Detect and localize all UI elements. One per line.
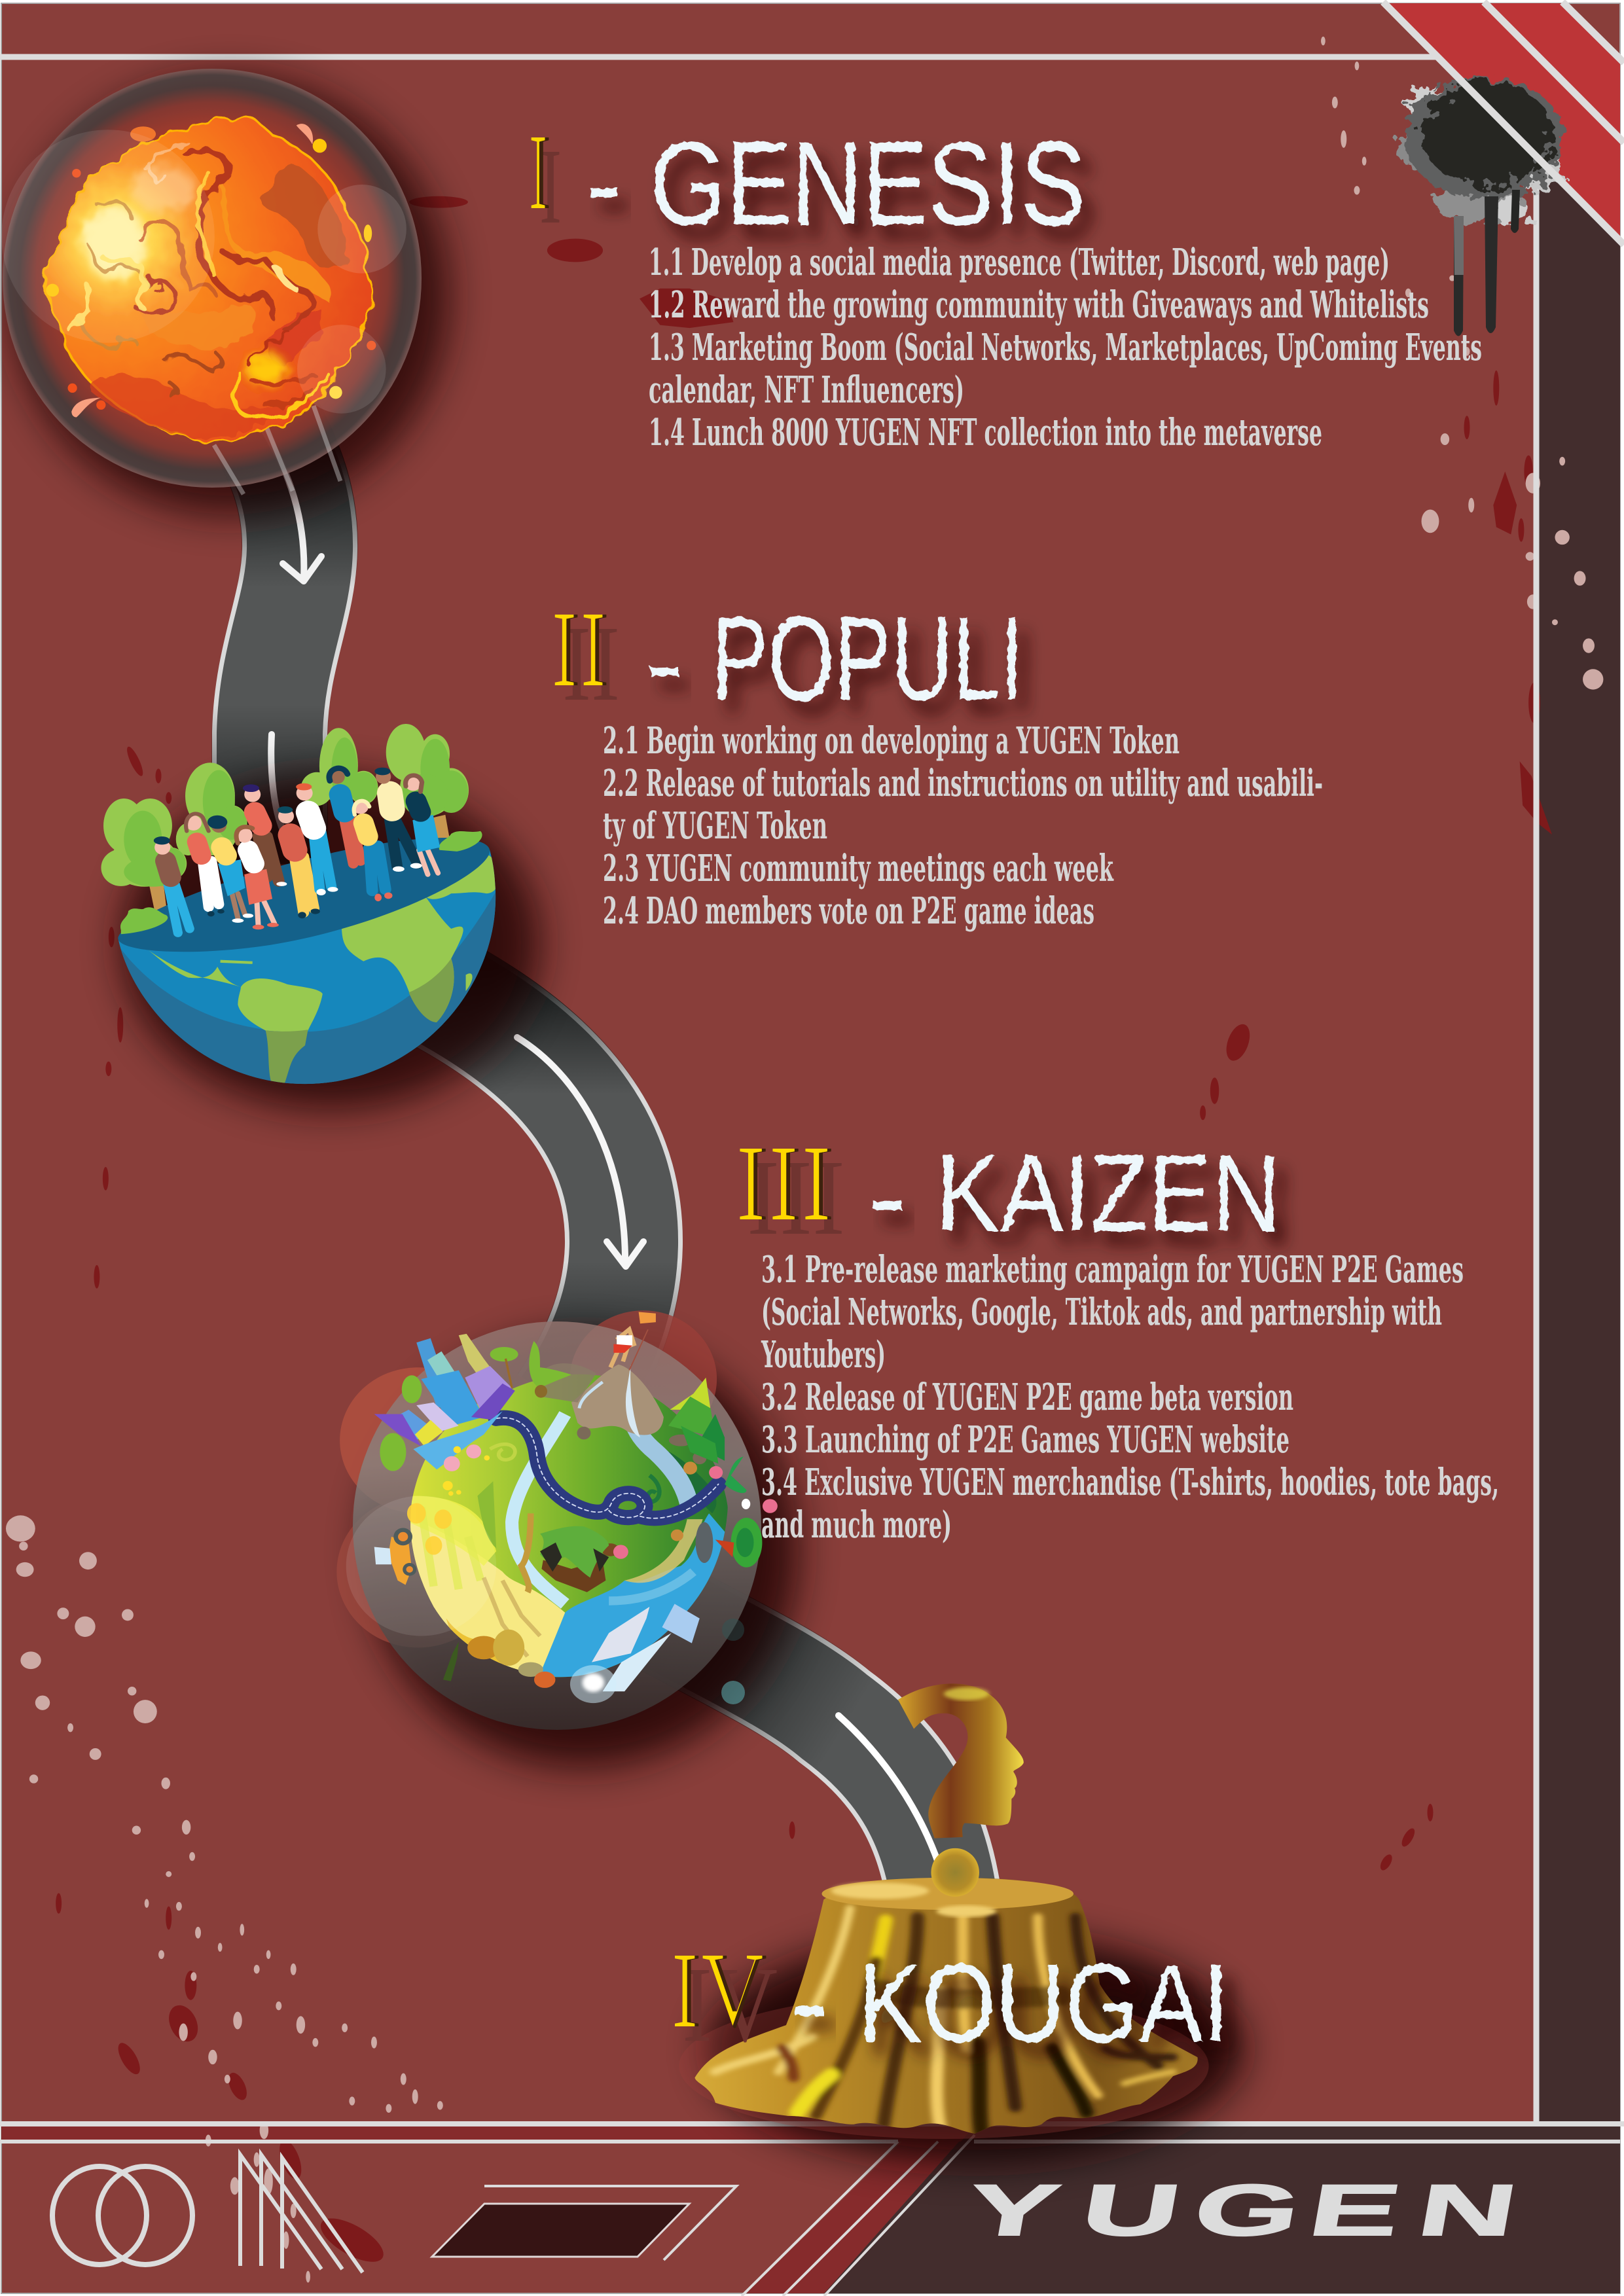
small bokeh bubble — [721, 1681, 745, 1704]
stage III text: Youtubers) — [761, 1333, 886, 1376]
shoes — [232, 863, 422, 923]
red glass bubbles behind the sphere — [340, 1367, 496, 1513]
arrow on first road — [265, 432, 321, 581]
trees — [101, 724, 469, 918]
yellow flowers — [442, 1446, 490, 1496]
globe — [118, 850, 496, 1084]
footer logo: M lines — [240, 2155, 363, 2272]
pine trees on the right — [668, 1378, 725, 1463]
stage II text: ty of YUGEN Token — [603, 804, 827, 848]
bush beside the planet — [731, 1518, 762, 1568]
stage II text — [603, 719, 1323, 933]
stage II heading: - — [645, 600, 683, 727]
right dark band — [1539, 160, 1620, 2124]
stage II heading — [552, 589, 1024, 727]
stage I text: calendar, NFT Influencers) — [649, 368, 964, 412]
stage I heading — [529, 112, 1086, 250]
half earth with community — [95, 724, 540, 1109]
stage III heading — [736, 1123, 1281, 1261]
corner diagonal lines — [1383, 2, 1624, 245]
stage I text — [649, 241, 1482, 454]
swirl ribbons — [70, 143, 330, 418]
road: sun to half earth — [249, 393, 321, 864]
corner red stripes — [1383, 3, 1620, 243]
stage IV heading: - — [790, 1939, 828, 2066]
stage III text — [761, 1248, 1499, 1547]
bushes — [120, 907, 168, 934]
stage II text: 2.4 DAO members vote on P2E game ideas — [603, 889, 1094, 933]
cloth folds — [715, 1909, 1173, 2133]
rocks by the shore — [696, 1522, 713, 1563]
mountain — [571, 1365, 664, 1435]
glass highlight — [346, 1496, 496, 1636]
bokeh dot on road — [722, 1619, 744, 1641]
orange jeep — [388, 1537, 412, 1585]
stage III heading: - — [869, 1133, 907, 1261]
stage I heading: - — [585, 120, 623, 248]
planet surface — [410, 1374, 728, 1677]
question mark head — [898, 1683, 1024, 1839]
footer logo: interlocking rings — [52, 2166, 192, 2265]
stage IV heading: IV — [672, 1930, 767, 2050]
droplets — [67, 169, 376, 410]
ink splat with drips — [1396, 77, 1564, 336]
stage IV heading: KOUGAI — [858, 1941, 1229, 2066]
question mark hook highlight — [944, 1687, 989, 1700]
stage III text: and much more) — [761, 1503, 952, 1547]
palm trees — [380, 1341, 571, 1471]
stage III heading: III — [736, 1123, 835, 1243]
stage I heading: I — [529, 112, 551, 232]
road: world to table — [628, 1597, 946, 1911]
shading on second road — [419, 982, 624, 1407]
centre line on third road — [839, 1715, 938, 1862]
footer diagonal red stripe — [746, 2124, 975, 2293]
brand wordmark: YUGEN — [962, 2170, 1523, 2251]
desert plants — [443, 1641, 459, 1681]
glass bubbles over the sun — [1, 130, 215, 343]
question mark dot — [931, 1848, 979, 1897]
city skyline — [374, 1334, 515, 1469]
stage I heading: GENESIS — [650, 117, 1086, 250]
draped gold table — [679, 1683, 1209, 2139]
road centre line below first arrow — [271, 734, 285, 834]
shading on first road — [249, 393, 300, 864]
stage II text: 2.3 YUGEN community meetings each week — [603, 847, 1114, 890]
stage IV heading — [672, 1930, 1229, 2066]
navy road on the planet — [496, 1418, 719, 1518]
stage II heading: II — [552, 589, 609, 709]
table shadow — [707, 1934, 1244, 2163]
footer dark parallelogram — [432, 2204, 689, 2257]
stage II heading: POPULI — [712, 592, 1024, 725]
cap of the hemisphere — [118, 838, 490, 952]
world planet in glass sphere — [336, 1310, 799, 1767]
sun body — [1, 117, 406, 442]
footer red strip — [1, 2126, 975, 2142]
road: half earth to world — [419, 982, 643, 1407]
sun planet in glass sphere — [1, 69, 450, 515]
palm island — [541, 1560, 605, 1592]
flower accents — [444, 1444, 481, 1471]
runner with flag — [611, 1312, 656, 1371]
stage III heading: KAIZEN — [936, 1132, 1281, 1255]
stage II text: 2.1 Begin working on developing a YUGEN Token — [603, 719, 1180, 762]
people — [154, 768, 440, 933]
footer parallelogram outline — [484, 2186, 736, 2260]
shading on third road — [628, 1597, 946, 1911]
iceberg — [592, 1607, 649, 1662]
arrow on second road — [517, 1037, 643, 1266]
footer dark panel — [824, 2124, 1620, 2293]
